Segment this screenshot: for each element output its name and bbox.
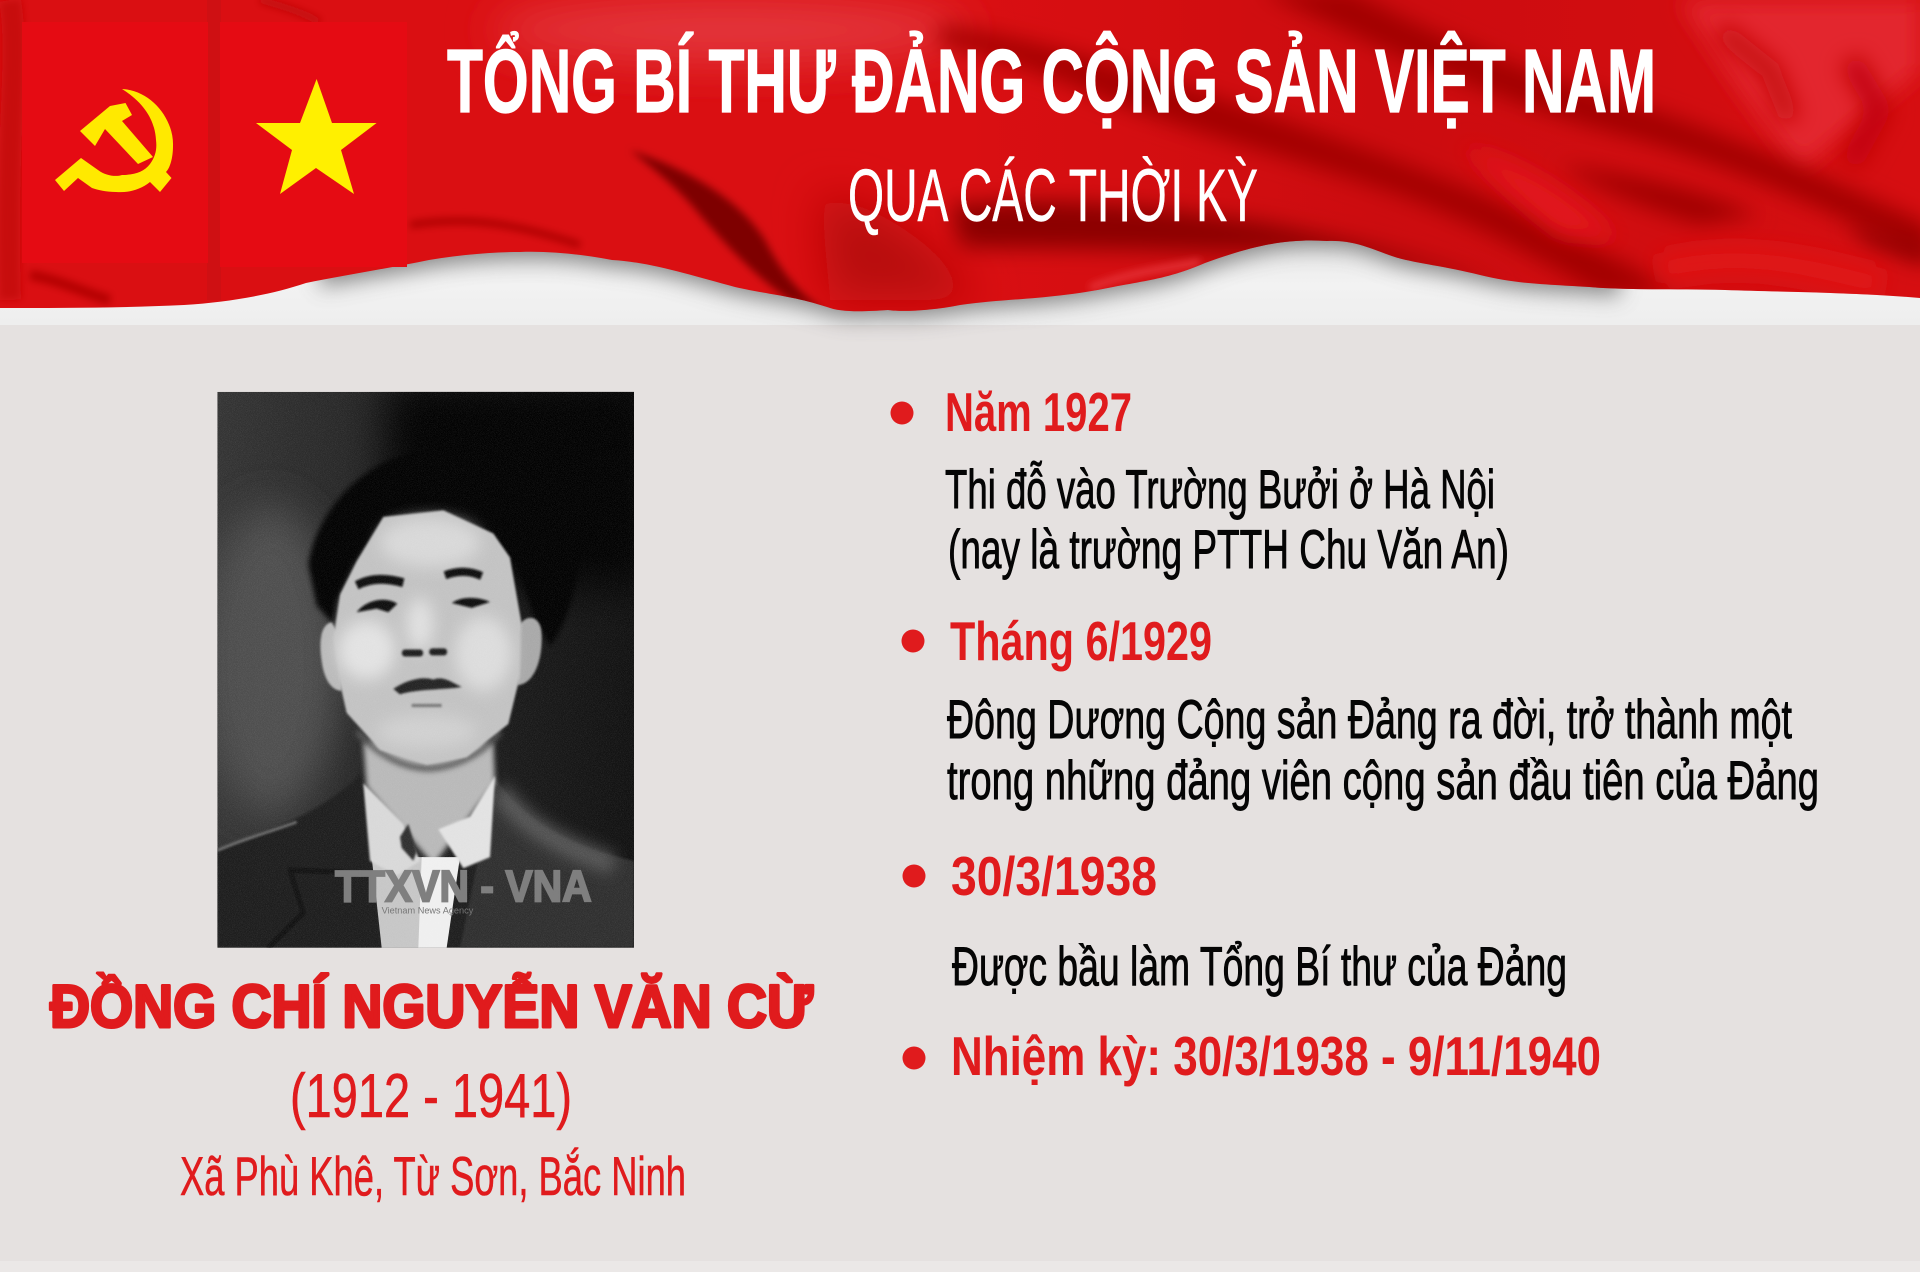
panel: biography identity: [50, 973, 813, 1207]
jacket left: [217, 772, 382, 948]
panel: timeline: [890, 381, 1819, 1087]
national flag: star: [220, 22, 407, 267]
date heading: 30/3/1938: [951, 845, 1157, 907]
eyes: [357, 600, 397, 612]
collar left: [363, 783, 420, 876]
icon: yellow star: [256, 79, 377, 194]
hair: [308, 450, 579, 646]
bullet: [902, 1046, 926, 1070]
description: [945, 458, 1509, 580]
panel: header banner: [0, 0, 1920, 325]
nose: [405, 652, 444, 653]
shoulder highlight: [217, 822, 297, 851]
timeline entry 6/1929: [902, 610, 1819, 811]
life years: (1912 - 1941): [290, 1062, 572, 1131]
shirt lower: [372, 857, 423, 948]
waving red flag background: [0, 0, 1920, 320]
tie knot shadow: [400, 824, 417, 861]
timeline entry 30/3/1938: [902, 845, 1567, 997]
party flag: hammer and sickle: [22, 22, 208, 263]
shirt placket: [418, 857, 460, 948]
lower lip shadow: [410, 702, 443, 708]
timeline entry 1927: [890, 381, 1509, 580]
white cloth band under flag: [0, 225, 1920, 325]
timeline entry term of office: [902, 1025, 1601, 1087]
birthplace: Xã Phù Khê, Từ Sơn, Bắc Ninh: [180, 1145, 686, 1207]
icon: hammer: [80, 103, 153, 164]
left ear: [320, 622, 342, 691]
lapel line: [268, 870, 343, 948]
jacket right highlight: [500, 791, 613, 865]
face: [333, 510, 522, 765]
mouth: [393, 678, 462, 694]
watermark: TTXVN - VNA: [335, 862, 592, 911]
watermark caption: Vietnam News Agency: [382, 905, 474, 915]
right ear: [517, 618, 542, 685]
jaw shadow: [357, 731, 500, 768]
description: (nay là trường PTTH Chu Văn An): [948, 518, 1509, 580]
name heading: ĐỒNG CHÍ NGUYỄN VĂN CỪ: [50, 973, 813, 1040]
subtitle: QUA CÁC THỜI KỲ: [848, 154, 1258, 237]
bullet: [902, 864, 926, 888]
panel: portrait photo: [200, 380, 653, 948]
face highlights: [338, 620, 395, 680]
date heading: Tháng 6/1929: [950, 610, 1212, 672]
neck: [363, 743, 495, 865]
bullet: [902, 630, 924, 652]
bullet: [890, 402, 914, 424]
term heading: Nhiệm kỳ: 30/3/1938 - 9/11/1940: [951, 1025, 1601, 1087]
eyebrows: [357, 579, 403, 585]
collar right: [438, 776, 495, 868]
description: Thi đỗ vào Trường Bưởi ở Hà Nội: [945, 458, 1495, 520]
film grain: [217, 392, 634, 948]
icon: sickle: [55, 89, 173, 192]
flag shadow: [308, 240, 1633, 332]
bottom strip: [0, 1261, 1920, 1272]
jacket right: [460, 778, 634, 948]
description: [947, 688, 1819, 811]
date heading: Năm 1927: [945, 381, 1132, 443]
description: Được bầu làm Tổng Bí thư của Đảng: [952, 935, 1567, 997]
